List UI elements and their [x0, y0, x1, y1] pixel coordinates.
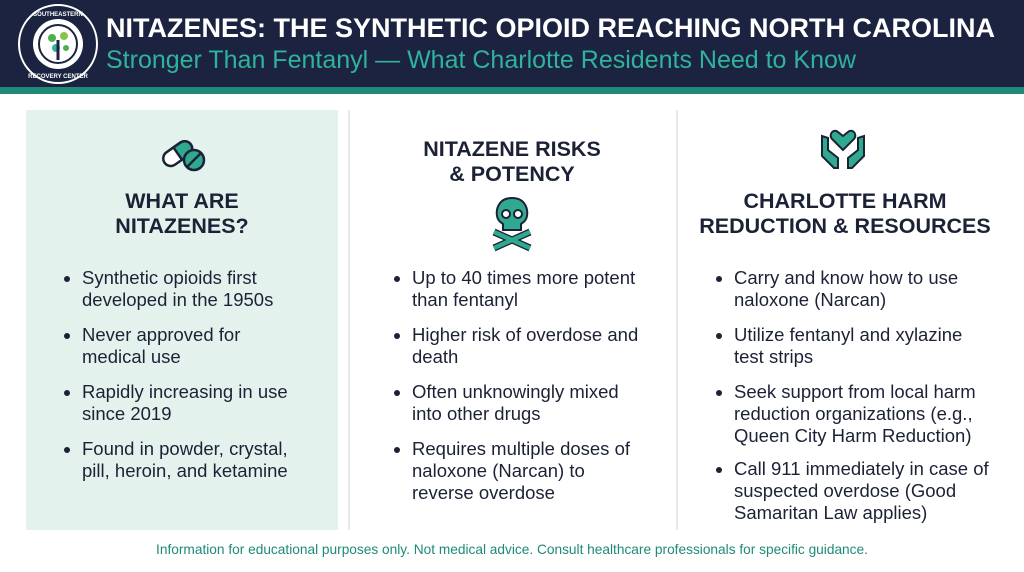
bullet list: Up to 40 times more potent: [412, 267, 635, 288]
heading: CHARLOTTE HARM: [743, 189, 947, 213]
bullet list: Requires multiple doses of: [412, 438, 630, 459]
bullet list: developed in the 1950s: [82, 289, 273, 310]
title: NITAZENES: THE SYNTHETIC OPIOID REACHING NORTH CAROLINA: [106, 13, 995, 43]
bullet list: death: [412, 346, 458, 367]
bullet list: Queen City Harm Reduction): [734, 425, 972, 446]
icon: skull: [492, 197, 532, 252]
heading: NITAZENES?: [115, 214, 249, 238]
bullet list: Call 911 immediately in case of: [734, 458, 989, 479]
heading: [699, 189, 991, 238]
heading: [115, 189, 249, 238]
heading: REDUCTION & RESOURCES: [699, 214, 991, 238]
heading: NITAZENE RISKS: [423, 137, 601, 161]
bullet list: Seek support from local harm: [734, 381, 976, 402]
logo: SOUTHEASTERN: [33, 12, 83, 18]
icon: pill: [162, 140, 206, 172]
logo: [18, 4, 98, 84]
panel: what are nitazenes: [26, 110, 338, 530]
bullet list: Often unknowingly mixed: [412, 381, 619, 402]
bullet list: reverse overdose: [412, 482, 555, 503]
bullet list: reduction organizations (e.g.,: [734, 403, 973, 424]
icon: hands heart: [821, 130, 865, 169]
bullet list: Never approved for: [82, 324, 240, 345]
heading: WHAT ARE: [125, 189, 239, 213]
bullet list: Carry and know how to use: [734, 267, 958, 288]
bullet list: since 2019: [82, 403, 171, 424]
bullet list: into other drugs: [412, 403, 541, 424]
bullet list: Rapidly increasing in use: [82, 381, 288, 402]
panel: resources: [699, 130, 991, 523]
bullet list: Samaritan Law applies): [734, 502, 927, 523]
bullet list: than fentanyl: [412, 289, 518, 310]
logo: RECOVERY CENTER: [28, 74, 89, 80]
footer disclaimer: Information for educational purposes only. Not medical advice. Consult healthcare professionals for specific guidance.: [156, 542, 868, 557]
bullet list: medical use: [82, 346, 181, 367]
panel: risks: [394, 137, 638, 503]
bullet list: test strips: [734, 346, 813, 367]
bullet list: [64, 267, 288, 481]
bullet list: Found in powder, crystal,: [82, 438, 288, 459]
bullet list: Synthetic opioids first: [82, 267, 257, 288]
bullet list: pill, heroin, and ketamine: [82, 460, 288, 481]
heading: & POTENCY: [449, 162, 575, 186]
bullet list: naloxone (Narcan) to: [412, 460, 585, 481]
bullet list: Utilize fentanyl and xylazine: [734, 324, 962, 345]
subtitle: Stronger Than Fentanyl — What Charlotte Residents Need to Know: [106, 46, 856, 74]
header: [0, 0, 1024, 87]
heading: [423, 137, 601, 186]
bullet list: [394, 267, 638, 503]
bullet list: Higher risk of overdose and: [412, 324, 638, 345]
bullet list: naloxone (Narcan): [734, 289, 886, 310]
bullet list: suspected overdose (Good: [734, 480, 956, 501]
bullet list: [716, 267, 989, 523]
